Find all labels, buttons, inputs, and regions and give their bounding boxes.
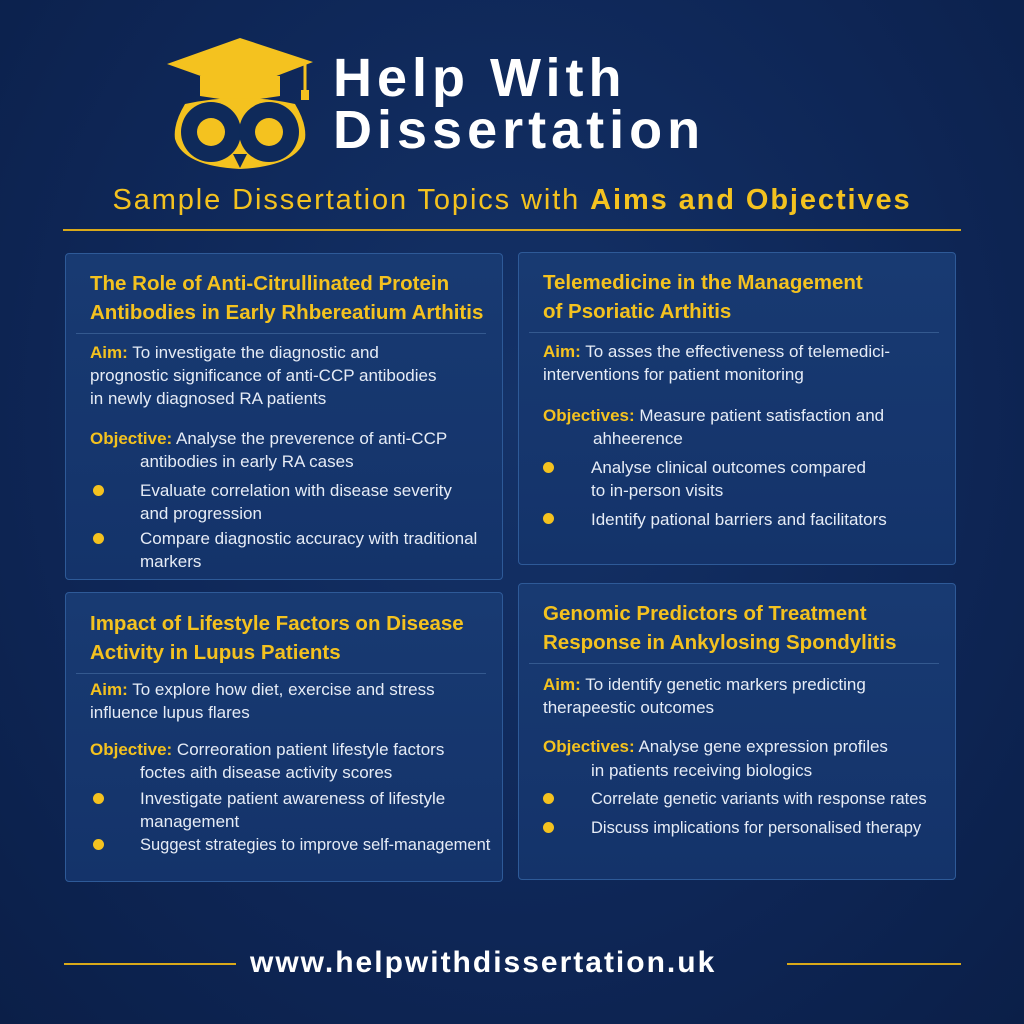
panel: telemedicine: Identify pational barriers and facilitators: [591, 510, 887, 529]
panel: telemedicine: Telemedicine in the Management: [543, 271, 863, 294]
panel: lupus lifestyle: Aim: To explore how diet, exercise and stress: [90, 680, 435, 699]
panel: genomic predictors: Discuss implications for personalised therapy: [591, 819, 921, 837]
panel: ACPA in RA: Objective: Analyse the preverence of anti-CCP: [90, 429, 447, 448]
panel: ACPA in RA: [65, 253, 503, 580]
panel: ACPA in RA: Antibodies in Early Rhbereatium Arthitis: [90, 301, 483, 324]
panel: genomic predictors: Objectives: Analyse gene expression profiles: [543, 737, 888, 756]
panel: genomic predictors: [518, 583, 956, 880]
brand name: Dissertation: [333, 100, 705, 160]
subtitle heading: Sample Dissertation Topics with Aims and Objectives: [112, 184, 912, 216]
panel: telemedicine: [518, 252, 956, 565]
panel: telemedicine: Analyse clinical outcomes compared: [591, 458, 866, 477]
footer url: www.helpwithdissertation.uk: [250, 946, 716, 979]
brand name: Help With: [333, 48, 626, 108]
panel: ACPA in RA: in newly diagnosed RA patients: [90, 389, 326, 408]
panel: lupus lifestyle: [65, 592, 503, 882]
panel: ACPA in RA: Compare diagnostic accuracy with traditional: [140, 529, 477, 548]
logo: owl with graduation cap: [167, 38, 313, 169]
panel: ACPA in RA: Evaluate correlation with disease severity: [140, 481, 452, 500]
panel: telemedicine: to in-person visits: [591, 481, 723, 500]
panel: telemedicine: interventions for patient monitoring: [543, 365, 804, 384]
panel: lupus lifestyle: influence lupus flares: [90, 703, 250, 722]
panel: genomic predictors: Correlate genetic variants with response rates: [591, 790, 927, 808]
panel: lupus lifestyle: Objective: Correoration patient lifestyle factors: [90, 740, 444, 759]
panel: telemedicine: Objectives: Measure patient satisfaction and: [543, 406, 884, 425]
panel: telemedicine: Aim: To asses the effectiveness of telemedici-: [543, 342, 890, 361]
panel: genomic predictors: Genomic Predictors of Treatment: [543, 602, 867, 625]
panel: ACPA in RA: and progression: [140, 504, 262, 523]
panel: ACPA in RA: antibodies in early RA cases: [140, 452, 354, 471]
panel: lupus lifestyle: foctes aith disease activity scores: [140, 763, 392, 782]
panel: genomic predictors: in patients receiving biologics: [591, 761, 812, 780]
panel: lupus lifestyle: Suggest strategies to improve self-management: [140, 836, 490, 854]
panel: telemedicine: ahheerence: [593, 429, 683, 448]
panel: ACPA in RA: Aim: To investigate the diagnostic and: [90, 343, 379, 362]
panel: genomic predictors: Aim: To identify genetic markers predicting: [543, 675, 866, 694]
panel: ACPA in RA: markers: [140, 552, 201, 571]
panel: lupus lifestyle: management: [140, 812, 239, 831]
panel: ACPA in RA: prognostic significance of anti-CCP antibodies: [90, 366, 436, 385]
panel: telemedicine: of Psoriatic Arthitis: [543, 300, 731, 323]
panel: genomic predictors: therapeestic outcomes: [543, 698, 714, 717]
brand name: [333, 48, 705, 160]
panel: lupus lifestyle: Impact of Lifestyle Factors on Disease: [90, 612, 464, 635]
panel: lupus lifestyle: Activity in Lupus Patients: [90, 641, 341, 664]
panel: lupus lifestyle: Investigate patient awareness of lifestyle: [140, 789, 445, 808]
panel: ACPA in RA: The Role of Anti-Citrullinated Protein: [90, 272, 449, 295]
panel: genomic predictors: Response in Ankylosing Spondylitis: [543, 631, 896, 654]
